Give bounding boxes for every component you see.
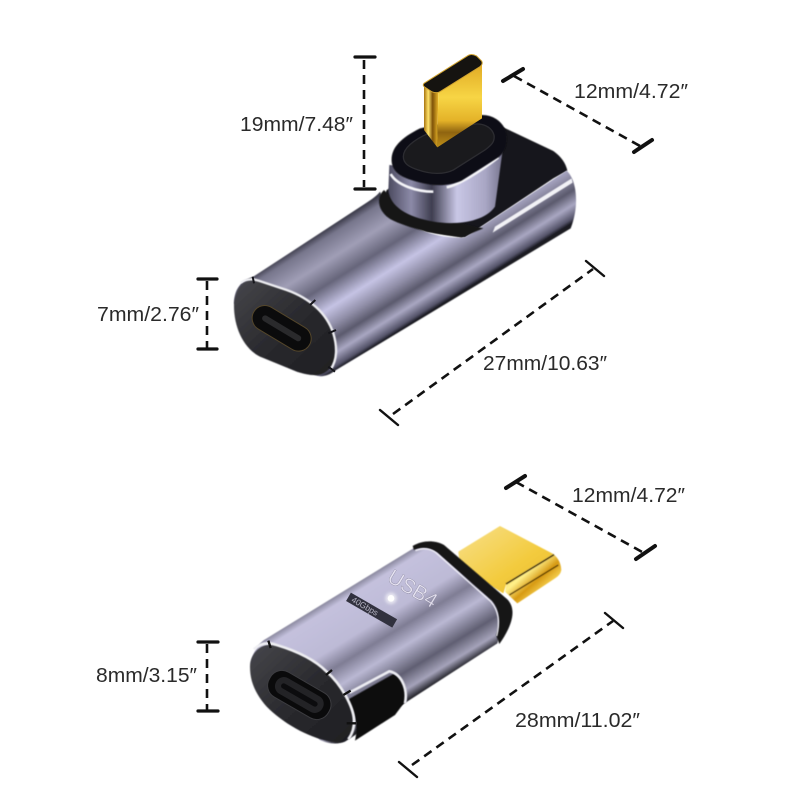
plug top face bbox=[458, 526, 553, 593]
end caps bbox=[355, 57, 375, 189]
dimension line bbox=[206, 644, 208, 710]
dimension line bbox=[514, 76, 640, 146]
label: 27mm/10.63″ bbox=[483, 352, 607, 375]
gold USB-C plug bbox=[423, 54, 482, 147]
end caps bbox=[503, 69, 652, 152]
black rubber collar bbox=[392, 115, 507, 185]
end caps bbox=[399, 613, 623, 777]
front face of the socket end bbox=[234, 280, 336, 375]
front face of the socket end bbox=[250, 644, 354, 742]
slot inner bbox=[272, 674, 327, 716]
plug seam bbox=[506, 555, 554, 584]
badge text: 40Gbps bbox=[350, 595, 380, 618]
LED dot bbox=[388, 595, 394, 602]
chrome strip on the body end bbox=[493, 178, 573, 233]
dimension line bbox=[393, 269, 593, 414]
rim notch marks bbox=[268, 641, 356, 723]
chrome rim on the socket end bbox=[254, 643, 354, 739]
dimension: end height 8mm bbox=[96, 642, 218, 711]
top adapter: right-angle USB-C device bbox=[234, 54, 576, 376]
metal body bbox=[251, 544, 500, 743]
plug edge bbox=[505, 554, 561, 603]
chrome line beside band bbox=[415, 549, 498, 636]
dimension: length 28mm bbox=[399, 613, 640, 777]
bottom adapter: USB4 40Gbps device bbox=[250, 526, 561, 743]
40Gbps badge bbox=[346, 592, 397, 628]
label: 7mm/2.76″ bbox=[97, 303, 199, 326]
end caps bbox=[506, 476, 655, 559]
USB-C socket slot bbox=[263, 666, 336, 724]
USB-C socket slot bbox=[247, 301, 316, 356]
label: 12mm/4.72″ bbox=[574, 80, 688, 103]
black tube on lower side bbox=[347, 674, 406, 741]
LED indicator bbox=[385, 593, 397, 604]
dimension line bbox=[516, 482, 644, 553]
black band around plug end bbox=[413, 541, 512, 644]
badge plate bbox=[346, 593, 397, 628]
slot outer bbox=[263, 666, 336, 724]
dimension: lower width 12mm bbox=[506, 476, 685, 559]
gold USB-C plug bbox=[458, 526, 561, 603]
slot tongue bbox=[280, 682, 319, 708]
collar inner ring bbox=[403, 124, 494, 173]
black plate behind the connector bbox=[380, 127, 567, 237]
label: 8mm/3.15″ bbox=[96, 664, 197, 687]
chrome rim on the socket end bbox=[241, 279, 336, 369]
plug left facet bbox=[424, 86, 438, 147]
end caps bbox=[198, 642, 218, 711]
slot outer bbox=[247, 301, 316, 356]
plug opening bbox=[423, 54, 482, 93]
dimension line bbox=[363, 60, 365, 187]
dimension: top width 12mm bbox=[503, 69, 688, 152]
plug lower seam bbox=[509, 565, 558, 595]
dimension line bbox=[206, 281, 208, 348]
metal body bbox=[234, 171, 576, 376]
slot tongue bbox=[261, 314, 302, 342]
lavender metal neck bbox=[388, 150, 503, 223]
dimension: length 27mm bbox=[380, 261, 607, 425]
USB4 lettering: USB4 bbox=[383, 565, 442, 613]
dimension: end height 7mm bbox=[97, 279, 217, 349]
dimension line bbox=[412, 621, 613, 765]
end caps bbox=[380, 261, 604, 425]
chrome highlights under the collar bbox=[391, 157, 498, 192]
dimension: height 19mm bbox=[240, 57, 375, 189]
label: 19mm/7.48″ bbox=[240, 113, 353, 136]
plug front face bbox=[437, 64, 482, 147]
label: 12mm/4.72″ bbox=[572, 484, 685, 507]
LED glow bbox=[385, 593, 397, 604]
chrome arc on tube bbox=[349, 671, 406, 703]
end caps bbox=[198, 279, 217, 349]
label: 28mm/11.02″ bbox=[515, 709, 640, 732]
rim notch marks bbox=[253, 277, 336, 372]
black collar base ring bbox=[379, 190, 483, 237]
